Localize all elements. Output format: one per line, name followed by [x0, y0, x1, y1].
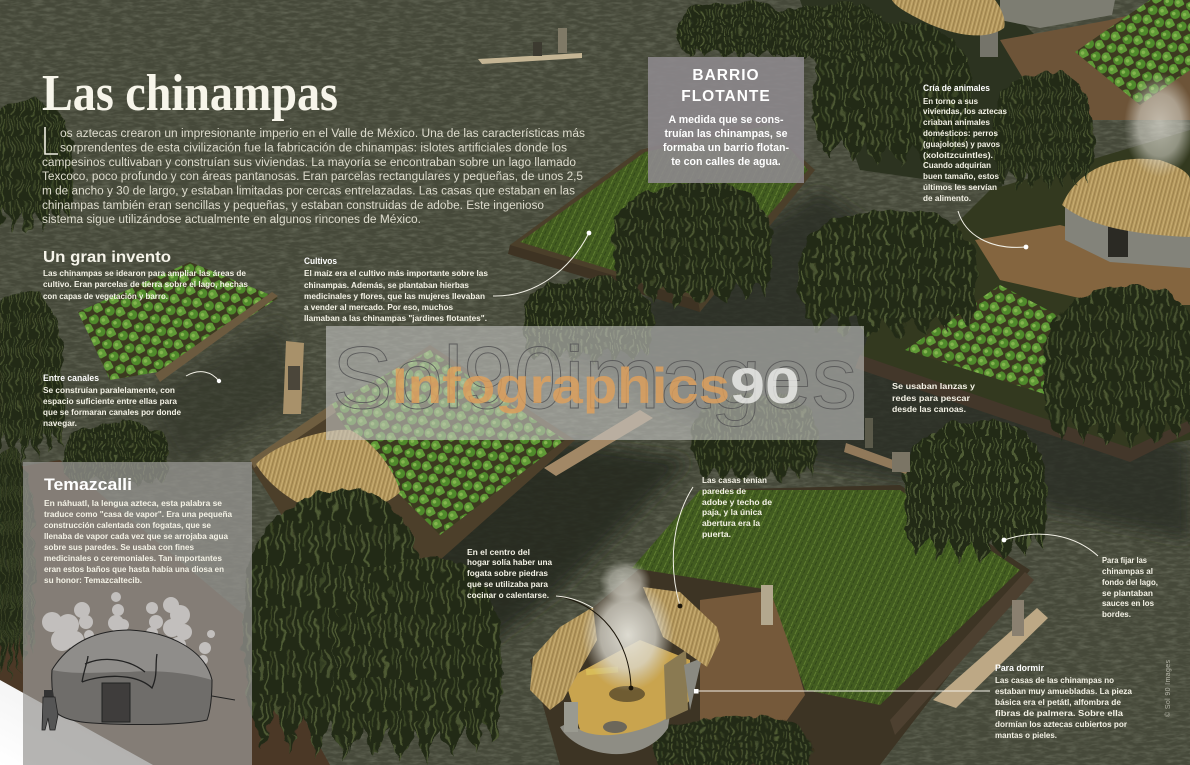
callout: Entre canales: Entre canales: [43, 373, 99, 383]
callout: Entre canales: que se formaran canales por donde: [43, 407, 181, 417]
callout: hearth: [467, 547, 633, 690]
island: top centre field: [508, 120, 815, 312]
intro paragraph: campesinos cultivaban y construían sus viviendas. La mayoría se encontraban sobre un lago llamado: [42, 157, 576, 169]
watermark: Sol90images: [332, 328, 857, 427]
panel: Temazcalli: [23, 462, 252, 765]
callout: hearth: fogata sobre piedras: [467, 568, 548, 578]
callout: Cría de animales: buen tamaño, estos: [923, 171, 999, 181]
callout: Para dormir: básica era el petátl, alfombra de: [995, 697, 1121, 707]
panel: Temazcalli: llenaba de vapor cada vez que se arrojaba agua: [44, 531, 228, 541]
section: Un gran invento: [43, 249, 248, 301]
callout: Para dormir: Las casas de las chinampas no: [995, 675, 1114, 685]
callout: Cría de animales: (guajolotes) y pavos: [923, 139, 1000, 149]
callout: Cultivos: El maíz era el cultivo más importante sobre las: [304, 268, 488, 278]
callout: willows: se plantaban: [1102, 588, 1153, 598]
callout: Para dormir: [694, 663, 1132, 740]
callout: hearth: En el centro del: [467, 547, 530, 557]
island: lower field with soil path: [530, 485, 1034, 765]
callout: house walls: [673, 475, 772, 608]
panel: Temazcalli: Temazcalli: [44, 475, 132, 494]
icon: temazcal steam bath: [42, 592, 235, 730]
intro paragraph: m de ancho y 30 de largo, y estaban limitadas por cercas entrelazadas. Las casas que estaban en las: [42, 186, 575, 198]
callout: house walls: puerta.: [702, 529, 731, 539]
callout: Para dormir: fibras de palmera. Sobre ella: [995, 708, 1123, 718]
panel: Temazcalli: En náhuatl, la lengua azteca, esta palabra se: [44, 498, 222, 508]
callout: Cría de animales: Cuando adquirían: [923, 160, 991, 170]
callout: Cultivos: llamaban a las chinampas "jardines flotantes".: [304, 313, 487, 323]
callout: fishing: desde las canoas.: [892, 404, 966, 414]
canoe: fishers at right: [844, 418, 910, 474]
panel: Barrio flotante: BARRIO: [692, 67, 760, 84]
hut: top thatched huts: [892, 0, 1115, 57]
callout: Cría de animales: domésticos: perros: [923, 128, 998, 138]
callout: willows: fondo del lago,: [1102, 577, 1158, 587]
canoe: left with figure: [283, 341, 304, 414]
hut: right round hut: [1062, 159, 1190, 268]
intro paragraph: chinampas también eran sencillas y pequeñas, y estaban construidas de adobe. Este ingenioso: [42, 200, 544, 212]
canoe: lower right with figure: [933, 600, 1048, 708]
island: left lettuce field: [78, 262, 278, 382]
callout: willows: chinampas al: [1102, 566, 1153, 576]
callout: Entre canales: [43, 372, 221, 428]
watermark: Infographics: [392, 358, 730, 414]
callout: Cultivos: chinampas. Además, se plantaban hierbas: [304, 280, 469, 290]
callout: fishing: Se usaban lanzas y: [892, 381, 975, 391]
panel: Temazcalli: su honor: Temazcaltecib.: [44, 575, 142, 585]
island: right with hut and lettuce: [855, 130, 1190, 462]
panel: Barrio flotante: formaba un barrio flotan-: [663, 142, 789, 154]
callout: house walls: adobe y techo de: [702, 497, 772, 507]
canoe: top with two figures: [478, 28, 582, 64]
callout: Cría de animales: últimos les servían: [923, 182, 997, 192]
intro paragraph: os aztecas crearon un impresionante imperio en el Valle de México. Una de las características más: [60, 128, 585, 140]
callout: Cultivos: Cultivos: [304, 256, 337, 266]
hut: centre thatched roof: [256, 430, 400, 513]
callout: house walls: Las casas tenían: [702, 475, 767, 485]
intro paragraph: sorprendentes de esta civilización fue la fabricación de chinampas: islotes artificiales donde los: [60, 142, 567, 154]
callout: willows: bordes.: [1102, 609, 1131, 619]
soil: left bank: [0, 460, 330, 765]
white corner wedge: [0, 680, 153, 765]
callout: house walls: paja, y la única: [702, 507, 762, 517]
callout: Para dormir: dormían los aztecas cubiertos por: [995, 719, 1128, 729]
callout: Cultivos: [304, 231, 591, 323]
callout: Entre canales: Se construían paralelamente, con: [43, 385, 175, 395]
callout: hearth: que se utilizaba para: [467, 579, 548, 589]
callout: Entre canales: navegar.: [43, 418, 77, 428]
callout: Cría de animales: En torno a sus: [923, 96, 978, 106]
callout: house walls: abertura era la: [702, 518, 760, 528]
panel: Temazcalli: medicinales o ceremoniales. Tan importantes: [44, 553, 222, 563]
callout: Cultivos: a vender al mercado. Por eso, muchos: [304, 302, 453, 312]
callout: Cría de animales: Cría de animales: [923, 83, 990, 93]
callout: willows: [1002, 534, 1158, 619]
drop cap L: [45, 127, 58, 154]
panel: Temazcalli: traduce como "casa de vapor". Era una pequeña: [44, 509, 232, 519]
callout: Cría de animales: (xoloitzcuintles).: [923, 150, 993, 160]
figure: farmer on soil path: [761, 585, 773, 625]
callout: hearth: cocinar o calentarse.: [467, 590, 549, 600]
panel: Temazcalli: sobre sus paredes. Se usaba con fines: [44, 542, 194, 552]
panel: Barrio flotante: te con calles de agua.: [671, 156, 781, 168]
callout: Entre canales: espacio suficiente entre ellas para: [43, 396, 177, 406]
canoe: centre: [544, 410, 653, 476]
callout: hearth: hogar solía haber una: [467, 557, 552, 567]
section: Un gran invento: Un gran invento: [43, 249, 171, 266]
title: Las chinampas: [42, 65, 338, 122]
callout: Cría de animales: [923, 83, 1028, 249]
callout: Cría de animales: criaban animales: [923, 117, 990, 127]
callout: willows: sauces en los: [1102, 598, 1154, 608]
intro paragraph: Texcoco, poco profundo y con áreas pantanosas. Eran parcelas rectangulares y pequeñas, de unos 2,5: [42, 171, 583, 183]
island: centre lettuce field: [250, 345, 575, 560]
smoke: cut-away house: [582, 560, 674, 691]
callout: Cultivos: medicinales y flores, que las mujeres llevaban: [304, 291, 485, 301]
panel: Barrio flotante: FLOTANTE: [681, 88, 771, 105]
callout: fishing: [892, 381, 975, 414]
island: top right field and soil: [800, 0, 1190, 190]
intro paragraph: sistema sigue utilizándose actualmente en algunos rincones de México.: [42, 214, 421, 226]
section: Un gran invento: cultivo. Eran parcelas de tierra sobre el lago, hechas: [43, 279, 248, 289]
copyright note: © Sol 90 Images: [1164, 660, 1172, 717]
callout: fishing: redes para pescar: [892, 393, 971, 403]
callout: willows: Para fijar las: [1102, 555, 1147, 565]
panel: Barrio flotante: [648, 57, 804, 183]
panel: Barrio flotante: truían las chinampas, se: [664, 128, 788, 140]
hut: cut-away house with hearth: [530, 587, 720, 754]
callout: Para dormir: Para dormir: [995, 663, 1045, 673]
panel: Temazcalli: eran estos baños que hasta había una diosa en: [44, 564, 224, 574]
panel: Temazcalli: construcción calentada con fogatas, que se: [44, 520, 211, 530]
callout: Para dormir: estaban muy amuebladas. La pieza: [995, 686, 1132, 696]
intro paragraph: [42, 127, 585, 226]
callout: Para dormir: mantas o pieles.: [995, 730, 1057, 740]
callout: Cría de animales: viviendas, los aztecas: [923, 106, 1007, 116]
callout: house walls: paredes de: [702, 486, 746, 496]
section: Un gran invento: Las chinampas se idearon para ampliar las áreas de: [43, 268, 246, 278]
panel: Barrio flotante: A medida que se cons-: [668, 114, 784, 126]
smoke: right hut: [1124, 73, 1190, 177]
callout: Cría de animales: de alimento.: [923, 193, 971, 203]
section: Un gran invento: con capas de vegetación y barro.: [43, 291, 168, 301]
watermark: 90: [730, 358, 800, 414]
